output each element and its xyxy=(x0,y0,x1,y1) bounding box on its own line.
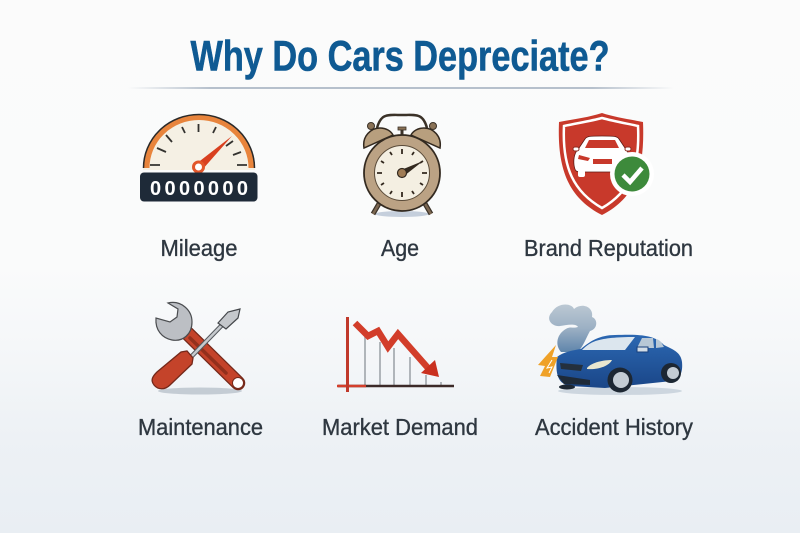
item: brand reputation xyxy=(524,113,693,261)
item: maintenance xyxy=(138,302,263,440)
icon: wrench and screwdriver xyxy=(152,302,244,394)
label: mileage: Mileage xyxy=(160,235,238,261)
icon: declining line chart xyxy=(337,317,454,392)
icon: alarm clock xyxy=(364,115,440,217)
item: age xyxy=(364,115,440,261)
label: market demand: Market Demand xyxy=(322,414,478,440)
title: Why Do Cars Depreciate? xyxy=(190,32,610,80)
icon: odometer gauge xyxy=(140,114,258,202)
label: age: Age xyxy=(381,235,419,261)
item: accident history xyxy=(535,304,693,440)
label: maintenance: Maintenance xyxy=(138,414,263,440)
item: mileage xyxy=(140,114,258,261)
item: market demand xyxy=(322,317,478,440)
icon: shield with car and check xyxy=(559,113,654,215)
icon: damaged car with smoke xyxy=(538,304,682,395)
label: accident history: Accident History xyxy=(535,414,693,440)
label: brand reputation: Brand Reputation xyxy=(524,235,693,261)
icon: odometer gauge: 0000000 xyxy=(150,178,248,200)
